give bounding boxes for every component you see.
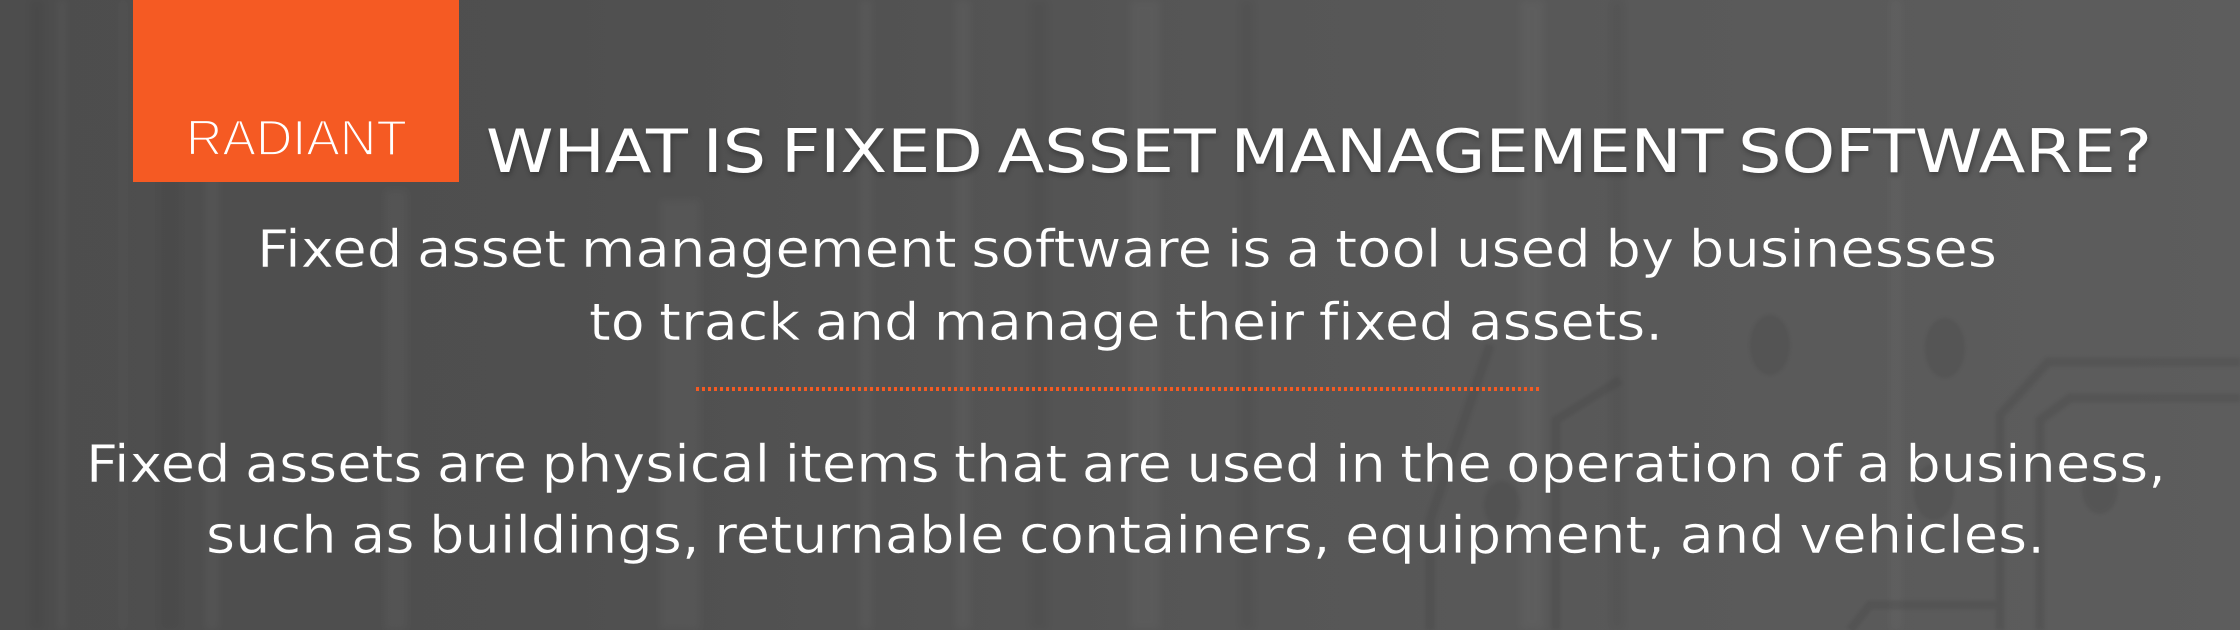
title: WHAT IS FIXED ASSET MANAGEMENT SOFTWARE? [486,117,2152,187]
logo wordmark: RADIANT: RADIANT [186,110,407,166]
text block: definition of fixed assets: Fixed assets are physical items that are used in the operation of a business, [86,435,2166,495]
text block: definition of fixed asset management software [257,220,1997,353]
text block: definition of fixed asset management software: to track and manage their fixed assets. [589,293,1663,353]
logo panel: orange box [133,0,459,182]
text block: definition of fixed assets: such as buildings, returnable containers, equipment, and vehicles. [206,506,2045,566]
divider: dotted orange line [696,387,1541,391]
text block: definition of fixed assets [86,435,2166,566]
text block: definition of fixed asset management software: Fixed asset management software is a tool used by businesses [257,220,1997,280]
